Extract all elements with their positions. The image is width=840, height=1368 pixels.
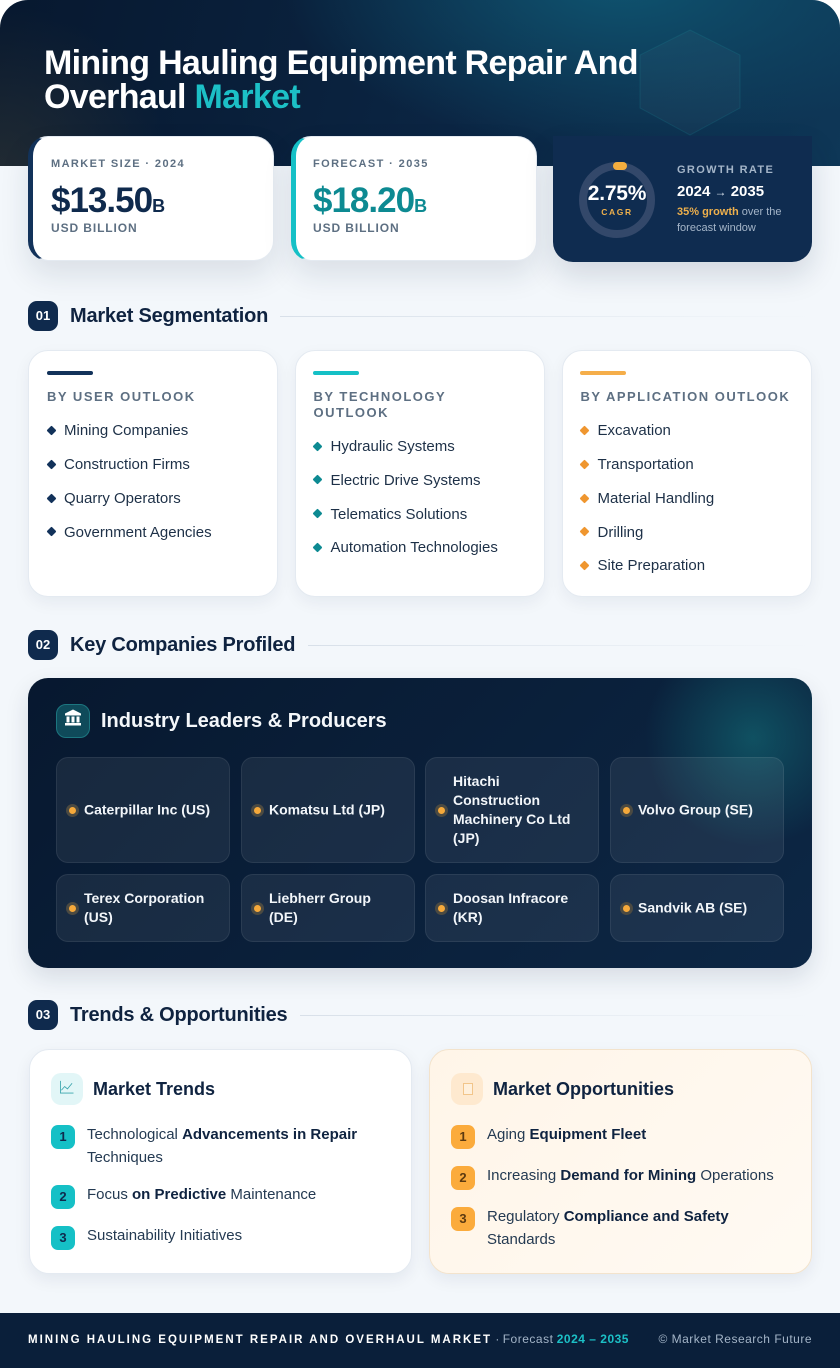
stat card: forecast: $18.20B	[313, 181, 427, 220]
stat card: forecast: FORECAST · 2035	[313, 158, 429, 170]
item 2	[51, 1185, 75, 1209]
CAGR value: 2.75%	[588, 182, 646, 205]
heading: Market Trends	[93, 1079, 215, 1099]
footer title: MINING HAULING EQUIPMENT REPAIR AND OVERHAUL MARKET · Forecast 2024 – 2035	[28, 1332, 629, 1346]
company: Doosan: Doosan Infracore (KR)	[453, 890, 568, 925]
item 1	[451, 1125, 475, 1149]
panel: by user outlook: Quarry Operators	[64, 490, 181, 507]
item 3	[451, 1207, 475, 1231]
company: Volvo	[610, 757, 784, 863]
panel: by user outlook: BY USER OUTLOOK	[47, 389, 196, 404]
panel: by technology outlook: Automation Technologies	[330, 539, 498, 556]
panel: by technology outlook: BY TECHNOLOGY OUTLOOK	[314, 389, 446, 420]
item 3: 3	[59, 1230, 67, 1245]
section heading 01	[28, 301, 654, 331]
icon: institution	[56, 704, 90, 738]
panel: market opportunities	[429, 1049, 812, 1274]
panel: by application outlook	[562, 350, 812, 597]
company: Hitachi: Hitachi Construction Machinery Co Ltd (JP)	[453, 773, 570, 846]
decorative hexagon	[640, 30, 740, 136]
growth rate card	[553, 136, 812, 262]
section heading 03: Trends & Opportunities	[70, 1004, 287, 1026]
company: Komatsu: Komatsu Ltd (JP)	[269, 802, 385, 818]
panel: by user outlook	[28, 350, 278, 597]
icon: missing glyph box	[451, 1073, 483, 1105]
section heading 03: 03	[36, 1007, 50, 1022]
growth note: 35% growth over the forecast window	[677, 206, 782, 234]
panel: by user outlook: Mining Companies	[64, 422, 188, 439]
stat card: market size	[28, 136, 274, 261]
footer credit: © Market Research Future	[658, 1332, 812, 1346]
panel heading: Industry Leaders & Producers	[101, 710, 387, 732]
panel: by application outlook: BY APPLICATION OUTLOOK	[580, 389, 790, 404]
panel: by technology outlook	[294, 350, 544, 597]
panel: by technology outlook: Electric Drive Systems	[330, 472, 481, 488]
item 1: 1	[459, 1129, 467, 1144]
company: Terex	[56, 874, 230, 942]
CAGR label: CAGR	[601, 207, 633, 217]
item 3: 3	[459, 1211, 467, 1226]
panel: by user outlook: Government Agencies	[64, 524, 212, 540]
section heading 01: 01	[36, 308, 50, 323]
company: Doosan	[425, 874, 599, 942]
panel: market opportunities: Regulatory Compliance and Safety Standards	[487, 1208, 729, 1248]
panel: by application outlook: Excavation	[598, 422, 671, 439]
panel: market trends	[29, 1049, 412, 1274]
stat card: market size: MARKET SIZE · 2024	[51, 158, 185, 170]
panel: market opportunities: Aging Equipment Fleet	[487, 1126, 646, 1143]
panel: market trends: Sustainability Initiatives	[87, 1227, 242, 1244]
section heading 03	[28, 1000, 660, 1030]
item 2	[451, 1166, 475, 1190]
item 3	[51, 1226, 75, 1250]
company: Hitachi	[425, 757, 599, 863]
panel: by technology outlook: Telematics Solutions	[330, 506, 467, 522]
company: Sandvik	[610, 874, 784, 942]
panel: market trends: Technological Advancements in Repair Techniques	[87, 1126, 357, 1166]
stat card: forecast: USD BILLION	[313, 221, 400, 235]
footer	[0, 1313, 840, 1368]
item 2: 2	[59, 1189, 67, 1204]
company: Liebherr	[241, 874, 415, 942]
panel: key companies	[28, 678, 812, 968]
company: Liebherr: Liebherr Group (DE)	[269, 890, 371, 925]
panel: by user outlook: Construction Firms	[64, 456, 190, 473]
title	[44, 44, 638, 116]
heading: Market Opportunities	[493, 1079, 674, 1099]
section heading 02: 02	[36, 637, 50, 652]
item 1: 1	[59, 1129, 67, 1144]
panel: market opportunities: Increasing Demand for Mining Operations	[487, 1167, 774, 1184]
company: Sandvik: Sandvik AB (SE)	[638, 900, 747, 916]
stat card: forecast	[291, 136, 537, 261]
growth years: 2024 → 2035	[677, 183, 764, 200]
section heading 01: Market Segmentation	[70, 305, 268, 327]
stat card: market size: USD BILLION	[51, 221, 138, 235]
company: Volvo: Volvo Group (SE)	[638, 802, 753, 818]
company: Caterpillar: Caterpillar Inc (US)	[84, 802, 210, 818]
panel: market trends: Focus on Predictive Maintenance	[87, 1186, 316, 1203]
header banner	[0, 0, 840, 166]
stat card: market size: $13.50B	[51, 181, 165, 220]
company: Terex: Terex Corporation (US)	[84, 890, 204, 925]
panel: by technology outlook: Hydraulic Systems	[330, 438, 455, 455]
title: Overhaul Market	[44, 78, 300, 116]
icon: chart	[51, 1073, 83, 1105]
company: Caterpillar	[56, 757, 230, 863]
panel: by application outlook: Transportation	[598, 456, 694, 473]
section heading 02	[28, 630, 662, 660]
title: Mining Hauling Equipment Repair And	[44, 44, 638, 82]
item 1	[51, 1125, 75, 1149]
company: Komatsu	[241, 757, 415, 863]
panel: by application outlook: Material Handling	[598, 490, 714, 507]
panel: by application outlook: Drilling	[598, 524, 643, 540]
item 2: 2	[459, 1170, 467, 1185]
growth label: GROWTH RATE	[677, 164, 774, 176]
panel: by application outlook: Site Preparation	[598, 557, 705, 574]
CAGR ring	[579, 162, 655, 238]
section heading 02: Key Companies Profiled	[70, 634, 295, 656]
